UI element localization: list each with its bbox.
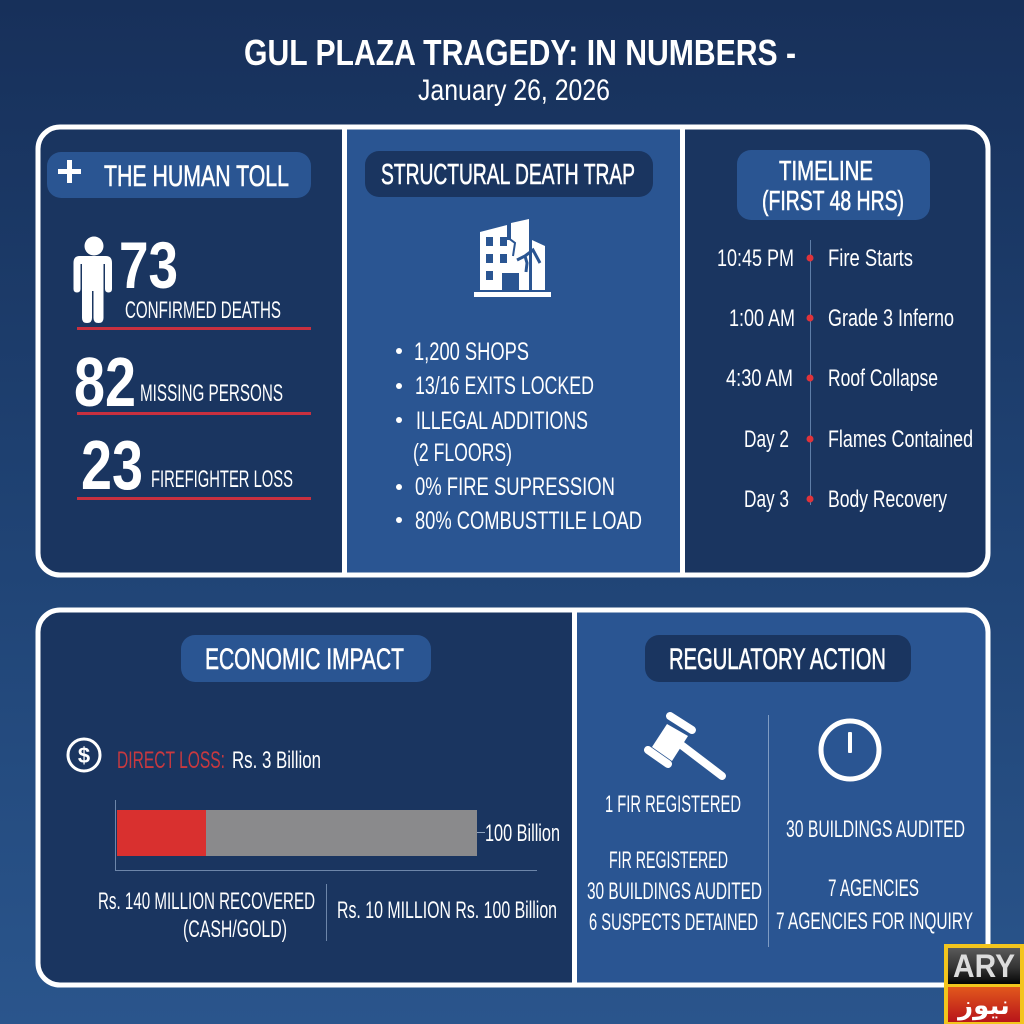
stat: 82 missing persons: MISSING PERSONS [140, 380, 283, 407]
event: body recovery: Body Recovery [828, 486, 947, 513]
panel: bottom row [38, 610, 988, 985]
stat: 23 firefighter loss: FIREFIGHTER LOSS [151, 466, 293, 493]
bar chart [115, 800, 560, 871]
heading: the human toll [47, 152, 311, 198]
heading: structural death trap: STRUCTURAL DEATH TRAP [381, 159, 635, 191]
text: recovered: Rs. 140 MILLION RECOVERED [98, 888, 315, 915]
list: structural facts: 13/16 EXITS LOCKED [415, 372, 594, 400]
stat: 23 firefighter loss: 23 [81, 426, 143, 504]
event: flames contained [744, 426, 973, 453]
panel: economic impact [68, 635, 560, 943]
heading: structural death trap [365, 151, 653, 197]
panel: regulatory action [587, 635, 973, 947]
heading: economic impact: ECONOMIC IMPACT [205, 643, 404, 676]
event: body recovery: Day 3 [744, 486, 789, 513]
logo: ARY News [944, 944, 1024, 1024]
event: grade 3 inferno [729, 305, 954, 332]
text: recovered: (CASH/GOLD) [183, 916, 287, 943]
event: fire starts [717, 245, 913, 272]
list: structural facts: 0% FIRE SUPRESSION [415, 473, 615, 501]
icon: clock [821, 721, 879, 779]
stat: 82 missing persons [74, 343, 311, 421]
list: right actions: 7 AGENCIES [828, 875, 919, 902]
stat: 23 firefighter loss [77, 426, 311, 504]
timeline axis [810, 240, 811, 505]
list: left actions: 6 SUSPECTS DETAINED [589, 909, 758, 936]
event: flames contained: Flames Contained [828, 426, 973, 453]
stat: 73 confirmed deaths [77, 228, 311, 330]
icon: dollar coin [68, 739, 100, 771]
list: left actions: FIR REGISTERED [609, 847, 728, 874]
list: left actions [587, 847, 762, 936]
heading: the human toll: THE HUMAN TOLL [104, 160, 289, 193]
text: 1 fir registered: 1 FIR REGISTERED [605, 791, 741, 818]
event: body recovery [744, 486, 947, 513]
list: left actions: 30 BUILDINGS AUDITED [587, 878, 762, 905]
list: structural facts: (2 FLOORS) [413, 439, 512, 467]
panel: structural death trap [365, 151, 653, 535]
title: January 26, 2026 [418, 74, 610, 107]
list: structural facts [396, 338, 642, 535]
icon: dollar coin: $ [78, 743, 90, 768]
icon: cracked building [474, 219, 551, 297]
icon: gavel [648, 716, 722, 776]
stat: 82 missing persons: 82 [74, 343, 136, 421]
title [244, 32, 796, 107]
text: direct loss: DIRECT LOSS: [117, 747, 225, 774]
logo: ARY News: ARY [953, 948, 1015, 984]
panel: the human toll [47, 152, 311, 504]
text: rs. 10 million: Rs. 10 MILLION Rs. 100 Billion [337, 897, 557, 924]
heading: regulatory action: REGULATORY ACTION [669, 643, 886, 676]
heading: economic impact [181, 635, 431, 682]
heading: timeline: (FIRST 48 HRS) [762, 185, 904, 216]
stat: 73 confirmed deaths: 73 [119, 228, 178, 302]
event: grade 3 inferno: Grade 3 Inferno [828, 305, 954, 332]
list: structural facts: 80% COMBUSTTILE LOAD [415, 507, 642, 535]
text: recovered [98, 888, 315, 943]
stat: 73 confirmed deaths: CONFIRMED DEATHS [125, 297, 281, 324]
panel: top row [38, 127, 988, 575]
event: roof collapse: 4:30 AM [726, 365, 793, 392]
heading: timeline: TIMELINE [779, 155, 873, 186]
text: direct loss: Rs. 3 Billion [232, 747, 321, 774]
bar chart: 100 Billion [485, 820, 560, 847]
event: roof collapse [726, 365, 938, 392]
event: fire starts: Fire Starts [828, 245, 913, 272]
list: structural facts: 1,200 SHOPS [414, 338, 529, 366]
list: right actions [776, 875, 973, 935]
event: fire starts: 10:45 PM [717, 245, 794, 272]
list: structural facts: ILLEGAL ADDITIONS [416, 407, 588, 435]
heading: regulatory action [645, 635, 911, 682]
heading: timeline [737, 150, 930, 220]
event: grade 3 inferno: 1:00 AM [729, 305, 795, 332]
icon: person [74, 236, 112, 323]
event: flames contained: Day 2 [744, 426, 789, 453]
event: roof collapse: Roof Collapse [828, 365, 938, 392]
title: GUL PLAZA TRAGEDY: IN NUMBERS - [244, 32, 796, 73]
panel: timeline [717, 150, 973, 513]
logo: ARY News: نیوز [956, 990, 1010, 1021]
